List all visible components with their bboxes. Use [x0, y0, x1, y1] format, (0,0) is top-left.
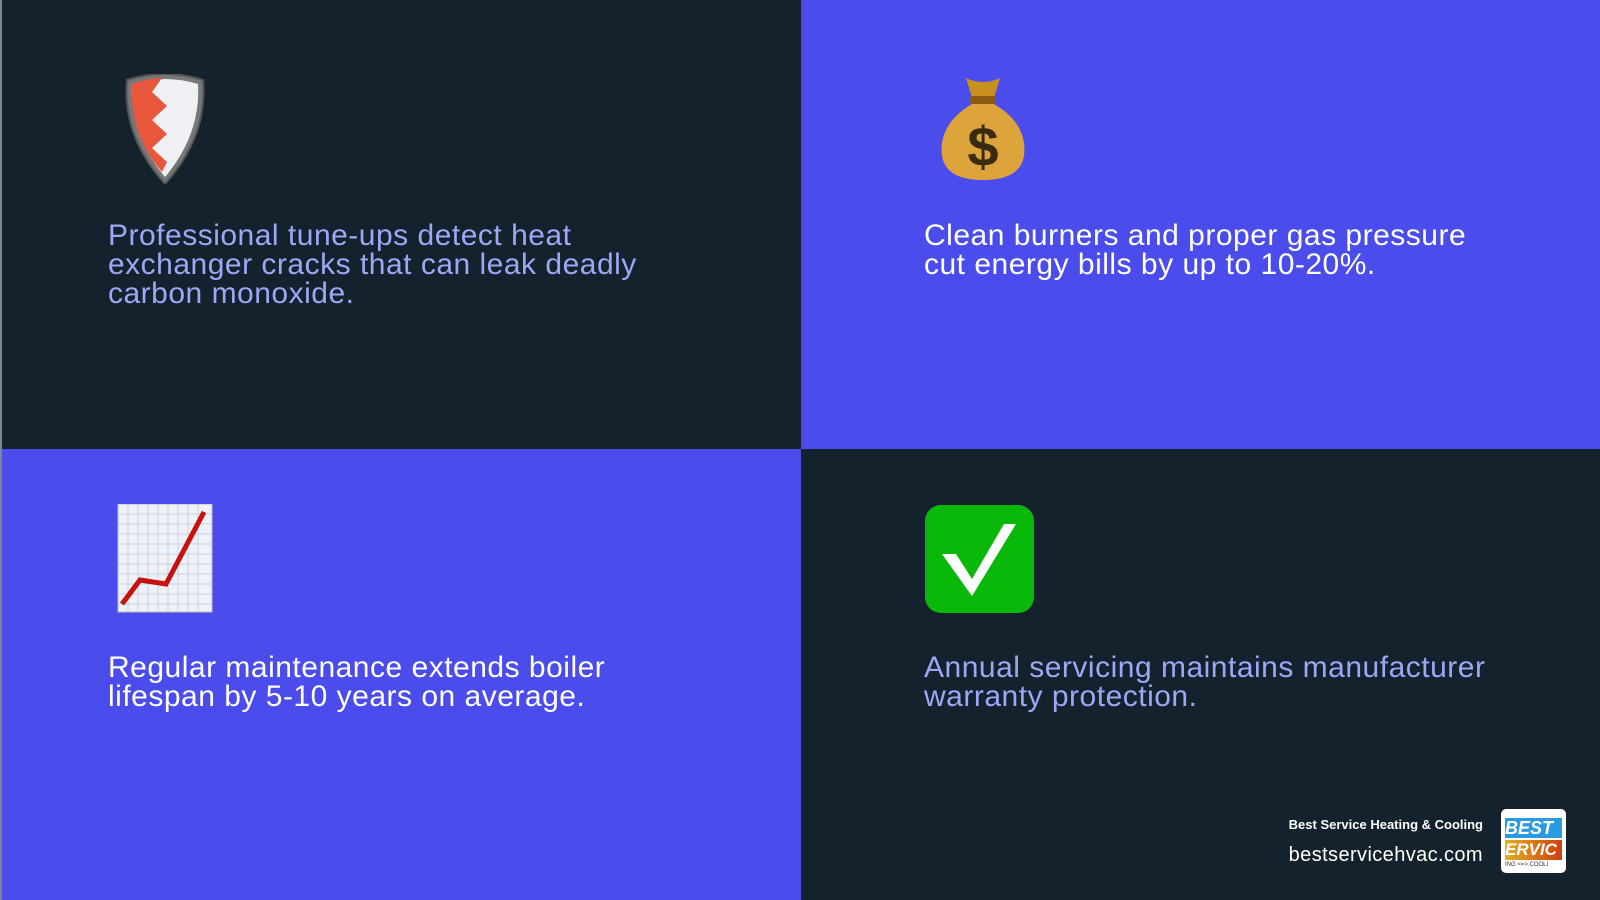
icon: shield	[126, 74, 204, 184]
icon: money bag: $	[967, 115, 999, 178]
text: savings: Clean burners and proper gas pressure	[924, 219, 1466, 252]
panel: warranty	[801, 449, 1600, 900]
icon: chart	[118, 504, 212, 612]
text: savings	[924, 219, 1466, 281]
logo: ING <=> COOLI	[1505, 862, 1548, 868]
logo	[1501, 809, 1566, 873]
text: savings: cut energy bills by up to 10-20%.	[924, 248, 1376, 281]
logo: ERVIC	[1505, 840, 1557, 859]
logo: BEST	[1505, 818, 1553, 838]
text: lifespan	[108, 651, 605, 713]
text: safety: Professional tune-ups detect heat	[108, 219, 571, 252]
icon: check	[925, 505, 1034, 613]
text: warranty: warranty protection.	[924, 680, 1197, 713]
text: safety: carbon monoxide.	[108, 277, 354, 310]
text: lifespan: Regular maintenance extends boiler	[108, 651, 605, 684]
url: bestservicehvac.com	[1289, 844, 1483, 866]
panel: safety	[0, 0, 801, 449]
text: warranty	[924, 651, 1485, 713]
text: warranty: Annual servicing maintains manufacturer	[924, 651, 1485, 684]
text: safety: exchanger cracks that can leak deadly	[108, 248, 637, 281]
icon: money bag	[942, 78, 1024, 180]
panel: lifespan	[0, 449, 801, 900]
company name: Best Service Heating & Cooling	[1289, 817, 1483, 832]
branding	[1289, 809, 1566, 873]
panel: savings	[801, 0, 1600, 449]
text: lifespan: lifespan by 5-10 years on average.	[108, 680, 585, 713]
text: safety	[108, 219, 637, 310]
